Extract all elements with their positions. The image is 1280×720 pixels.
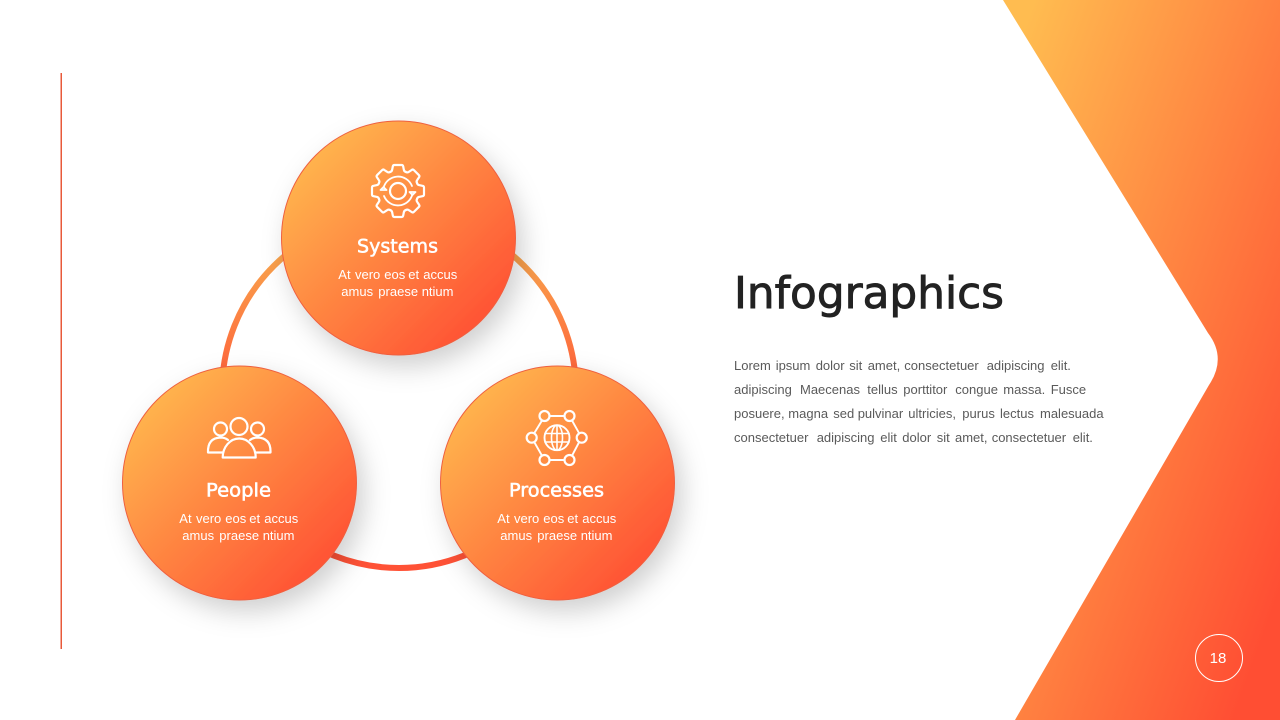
body paragraph [734, 358, 1104, 445]
body paragraph: elit. [1073, 430, 1093, 445]
body paragraph: ipsum [776, 358, 810, 373]
description: Systems: vero [355, 267, 380, 282]
node: Processes: praese [537, 528, 577, 543]
description: Processes: At [497, 511, 510, 526]
icon: globe network [527, 411, 587, 465]
title: Infographics [734, 268, 1004, 319]
description: People: eos [225, 511, 247, 526]
description: Systems: At [338, 267, 351, 282]
body paragraph: porttitor [903, 382, 948, 397]
connecting ring [222, 214, 576, 568]
node: Processes: amus [500, 528, 533, 543]
body paragraph: lectus [1000, 406, 1034, 421]
node: People: amus [182, 528, 215, 543]
body paragraph: sed [833, 406, 854, 421]
description: People: accus [264, 511, 299, 526]
body paragraph: dolor [902, 430, 932, 445]
body paragraph: sit [937, 430, 950, 445]
body paragraph: consectetuer [992, 430, 1067, 445]
body paragraph: magna [788, 406, 829, 421]
body paragraph: massa. [1003, 382, 1045, 397]
body paragraph: Maecenas [800, 382, 860, 397]
node: Systems [282, 121, 516, 355]
body paragraph: posuere, [734, 406, 785, 421]
icon: gear [372, 165, 424, 217]
body paragraph: consectetuer [904, 358, 979, 373]
label: People: People [206, 480, 271, 502]
node: Systems: ntium [422, 284, 453, 299]
description: Systems: accus [423, 267, 458, 282]
node: People: praese [219, 528, 259, 543]
body paragraph: malesuada [1040, 406, 1104, 421]
description: Systems: et [408, 267, 420, 282]
body paragraph: adipiscing [817, 430, 875, 445]
body paragraph: pulvinar [858, 406, 904, 421]
description: Processes: et [567, 511, 579, 526]
node: People [122, 366, 356, 600]
label: Systems: Systems [357, 236, 438, 258]
description: Processes: accus [582, 511, 617, 526]
body paragraph: purus [962, 406, 995, 421]
description: People: et [249, 511, 261, 526]
description: Systems: eos [384, 267, 406, 282]
body paragraph: amet, [955, 430, 988, 445]
label: Processes: Processes [509, 480, 604, 502]
body paragraph: Fusce [1051, 382, 1086, 397]
body paragraph: congue [955, 382, 998, 397]
left vertical rule [60, 73, 62, 649]
icon: people [208, 418, 271, 458]
body paragraph: dolor [816, 358, 845, 373]
description: Processes: vero [514, 511, 539, 526]
body paragraph: adipiscing [734, 382, 792, 397]
body paragraph: elit [880, 430, 897, 445]
node: Systems: praese [378, 284, 418, 299]
body paragraph: Lorem [734, 358, 771, 373]
body paragraph: adipiscing [987, 358, 1045, 373]
body paragraph: consectetuer [734, 430, 809, 445]
node: Processes [440, 366, 674, 600]
description: People: At [179, 511, 192, 526]
body paragraph: elit. [1051, 358, 1071, 373]
body paragraph: amet, [868, 358, 900, 373]
description: People: vero [196, 511, 221, 526]
node: Systems: amus [341, 284, 374, 299]
body paragraph: ultricies, [908, 406, 956, 421]
node: People: ntium [263, 528, 294, 543]
background chevron shape [1003, 0, 1280, 720]
page number badge: 18 [1210, 650, 1226, 667]
page number badge [1196, 634, 1242, 682]
description: Processes: eos [543, 511, 565, 526]
body paragraph: tellus [867, 382, 898, 397]
body paragraph: sit [849, 358, 863, 373]
node: Processes: ntium [581, 528, 612, 543]
